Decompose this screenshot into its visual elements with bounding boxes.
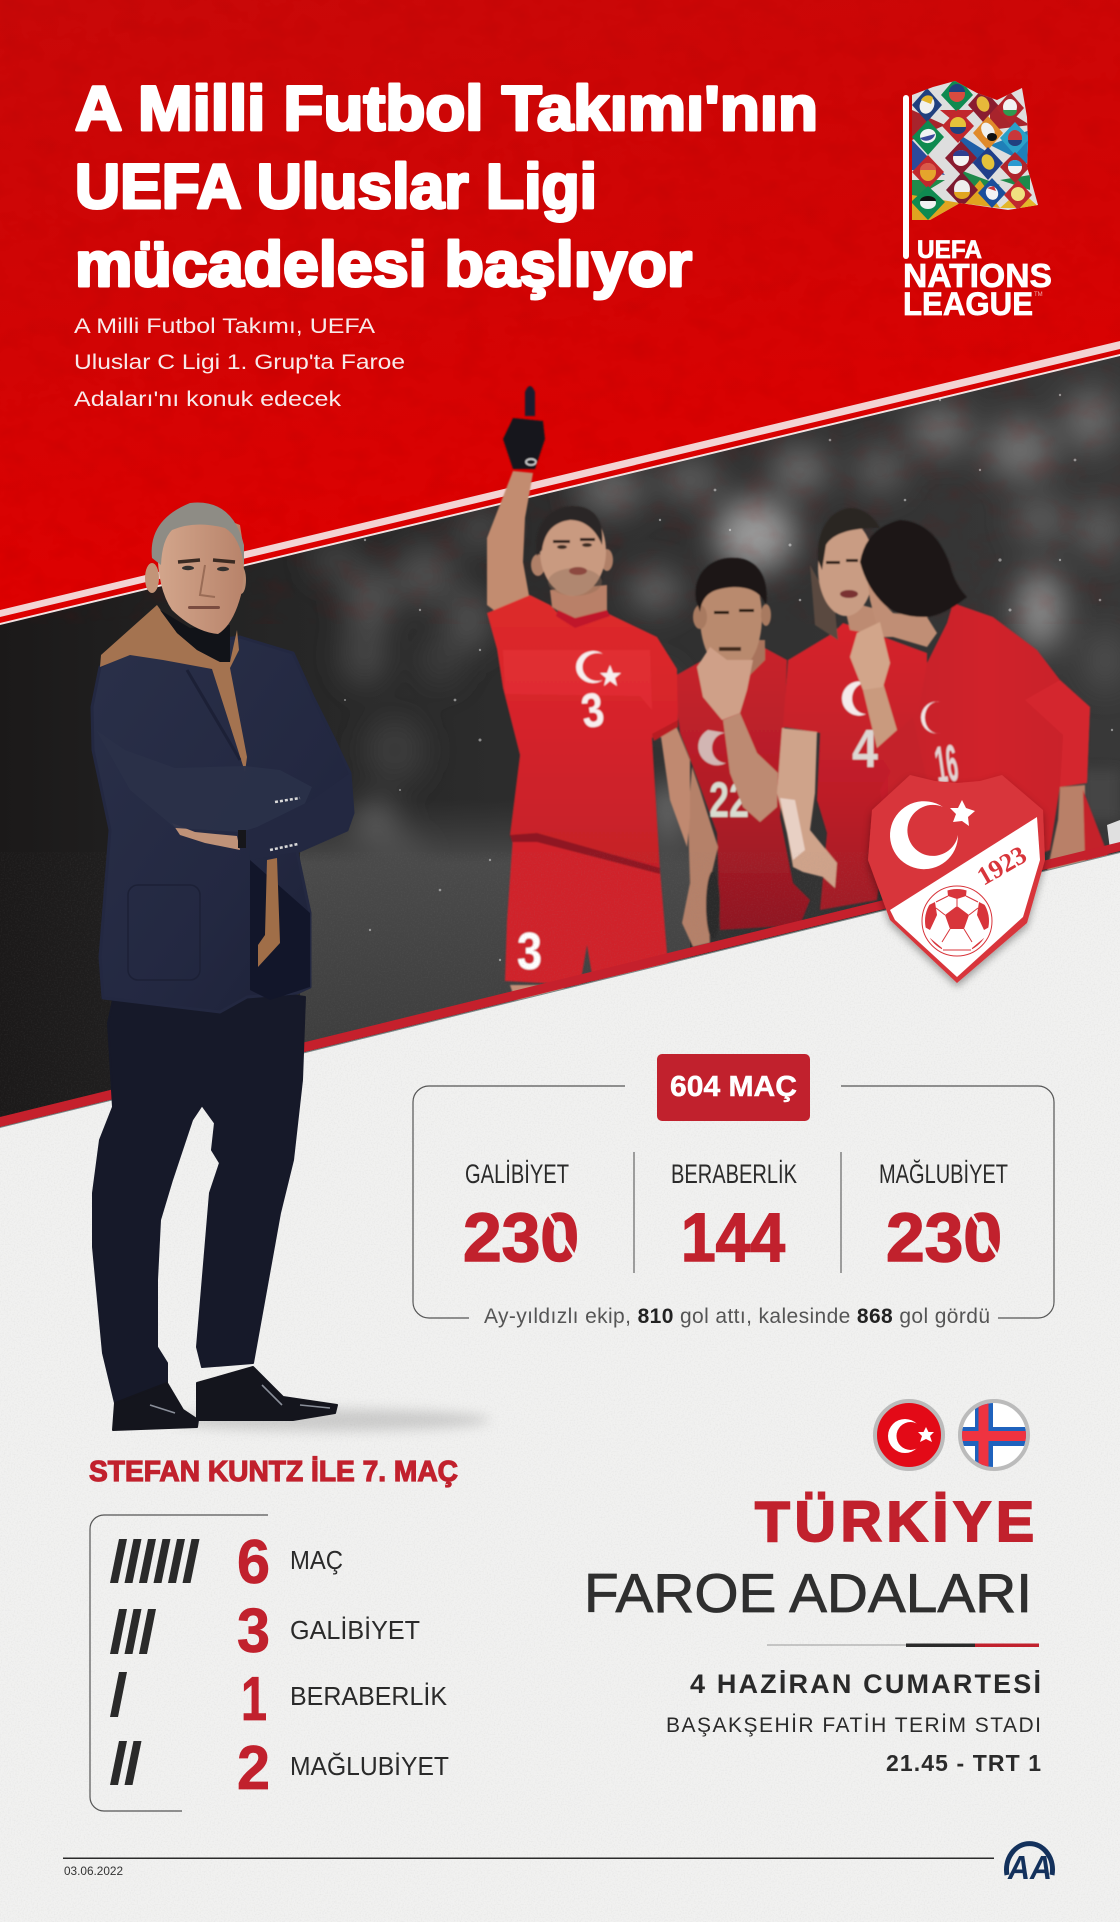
player 3: long hair centre right: 4 — [852, 719, 878, 779]
date: 03.06.2022 — [64, 1864, 123, 1878]
player 2: number 22 — [673, 558, 810, 947]
logo: Anadolu Agency AA: AA — [1007, 1849, 1052, 1886]
shoes — [113, 1383, 198, 1430]
stat: beraberlik 144 — [671, 1158, 797, 1276]
tally row: 1 draw — [110, 1665, 448, 1734]
scarf — [100, 605, 247, 772]
badge: Turkish Football Federation shield: 1923 — [972, 840, 1032, 891]
footer rule — [63, 1858, 994, 1859]
stat: mağlubiyet 230 — [879, 1158, 1008, 1276]
badge: Turkish Football Federation shield — [868, 775, 1045, 983]
tally row: 2 losses: 2 — [237, 1734, 270, 1803]
stats box outline — [413, 1086, 1054, 1318]
bottom paper panel edge with red stripe — [0, 842, 1120, 1922]
stat: beraberlik 144: BERABERLİK — [671, 1158, 797, 1189]
logo: UEFA Nations League — [903, 76, 1052, 322]
title: UEFA Uluslar Ligi — [75, 152, 597, 222]
tally row: 2 losses — [110, 1734, 449, 1803]
icon: Turkey flag — [875, 1401, 943, 1469]
tally row: 3 wins: 3 — [237, 1597, 270, 1666]
tally row: 1 draw: 1 — [241, 1665, 267, 1734]
goals caption: Ay-yıldızlı ekip, 810 gol attı, kalesinde 868 gol gördü — [484, 1305, 990, 1328]
tally row: 6 matches: MAÇ — [290, 1545, 343, 1575]
player 4: back right — [850, 520, 1110, 910]
turtleneck — [160, 610, 230, 662]
stat: mağlubiyet 230: MAĞLUBİYET — [879, 1158, 1008, 1189]
heading: Türkiye: TÜRKİYE — [755, 1490, 1034, 1554]
subtitle text block — [74, 315, 405, 411]
stat: mağlubiyet 230: 230 — [886, 1199, 1002, 1276]
logo: UEFA Nations League: TM — [1034, 292, 1043, 298]
coat — [92, 637, 353, 1012]
tag: 604 MAÇ: 604 MAÇ — [670, 1071, 797, 1103]
stat: beraberlik 144: 144 — [681, 1199, 785, 1276]
tally row: 6 matches — [110, 1528, 343, 1597]
players group photo — [487, 386, 1110, 1000]
subtitle text block: Adaları'nı konuk edecek — [74, 388, 342, 411]
logo: UEFA Nations League: NATIONS — [903, 257, 1052, 294]
stat: galibiyet 230: GALİBİYET — [465, 1158, 569, 1189]
match details — [666, 1669, 1041, 1776]
match details: 4 HAZİRAN CUMARTESİ — [690, 1669, 1041, 1699]
tally row: 6 matches: 6 — [237, 1528, 270, 1597]
folded arms — [172, 823, 240, 850]
logo: UEFA Nations League: UEFA — [917, 236, 982, 264]
player 3: long hair centre right — [777, 508, 927, 910]
tally row: 1 draw: BERABERLİK — [290, 1681, 448, 1711]
player 4: back right: 16 — [932, 734, 961, 795]
panel: Kuntz tally table — [90, 1515, 449, 1811]
tally row: 2 losses: MAĞLUBİYET — [290, 1751, 449, 1781]
title — [75, 74, 818, 300]
panel: red header background — [0, 0, 1120, 625]
match details: 21.45 - TRT 1 — [886, 1750, 1041, 1776]
trousers — [93, 985, 305, 1403]
ground shadow — [170, 1409, 490, 1431]
player 1: number 3 pointing up: 3 — [578, 683, 607, 739]
player 2: number 22: 22 — [709, 772, 749, 828]
heading: Stefan Kuntz record: STEFAN KUNTZ İLE 7. MAÇ — [89, 1456, 458, 1488]
subtitle text block: A Milli Futbol Takımı, UEFA — [74, 315, 375, 338]
panel: all-time record 604 matches — [413, 1054, 1054, 1328]
match divider — [767, 1644, 1039, 1647]
panel: grey stadium crowd photo band — [0, 355, 1120, 1130]
stat: galibiyet 230 — [463, 1158, 579, 1276]
photo: coach Stefan Kuntz — [92, 503, 490, 1431]
tag: 604 MAÇ — [657, 1054, 810, 1121]
logo: UEFA Nations League: LEAGUE — [903, 286, 1033, 322]
player 1: number 3 pointing up — [487, 386, 690, 1000]
head — [145, 563, 159, 593]
title: mücadelesi başlıyor — [75, 230, 692, 300]
title: A Milli Futbol Takımı'nın — [75, 74, 818, 144]
subtitle text block: Uluslar C Ligi 1. Grup'ta Faroe — [74, 351, 405, 374]
player 1: number 3 pointing up: 3 — [517, 923, 542, 981]
match details: BAŞAKŞEHİR FATİH TERİM STADI — [666, 1714, 1041, 1737]
tally row: 3 wins — [110, 1597, 420, 1666]
icon: Faroe Islands flag — [960, 1400, 1030, 1470]
tally row: 3 wins: GALİBİYET — [290, 1615, 420, 1645]
heading: Faroe Adaları: FAROE ADALARI — [584, 1562, 1032, 1624]
stat: galibiyet 230: 230 — [463, 1199, 579, 1276]
